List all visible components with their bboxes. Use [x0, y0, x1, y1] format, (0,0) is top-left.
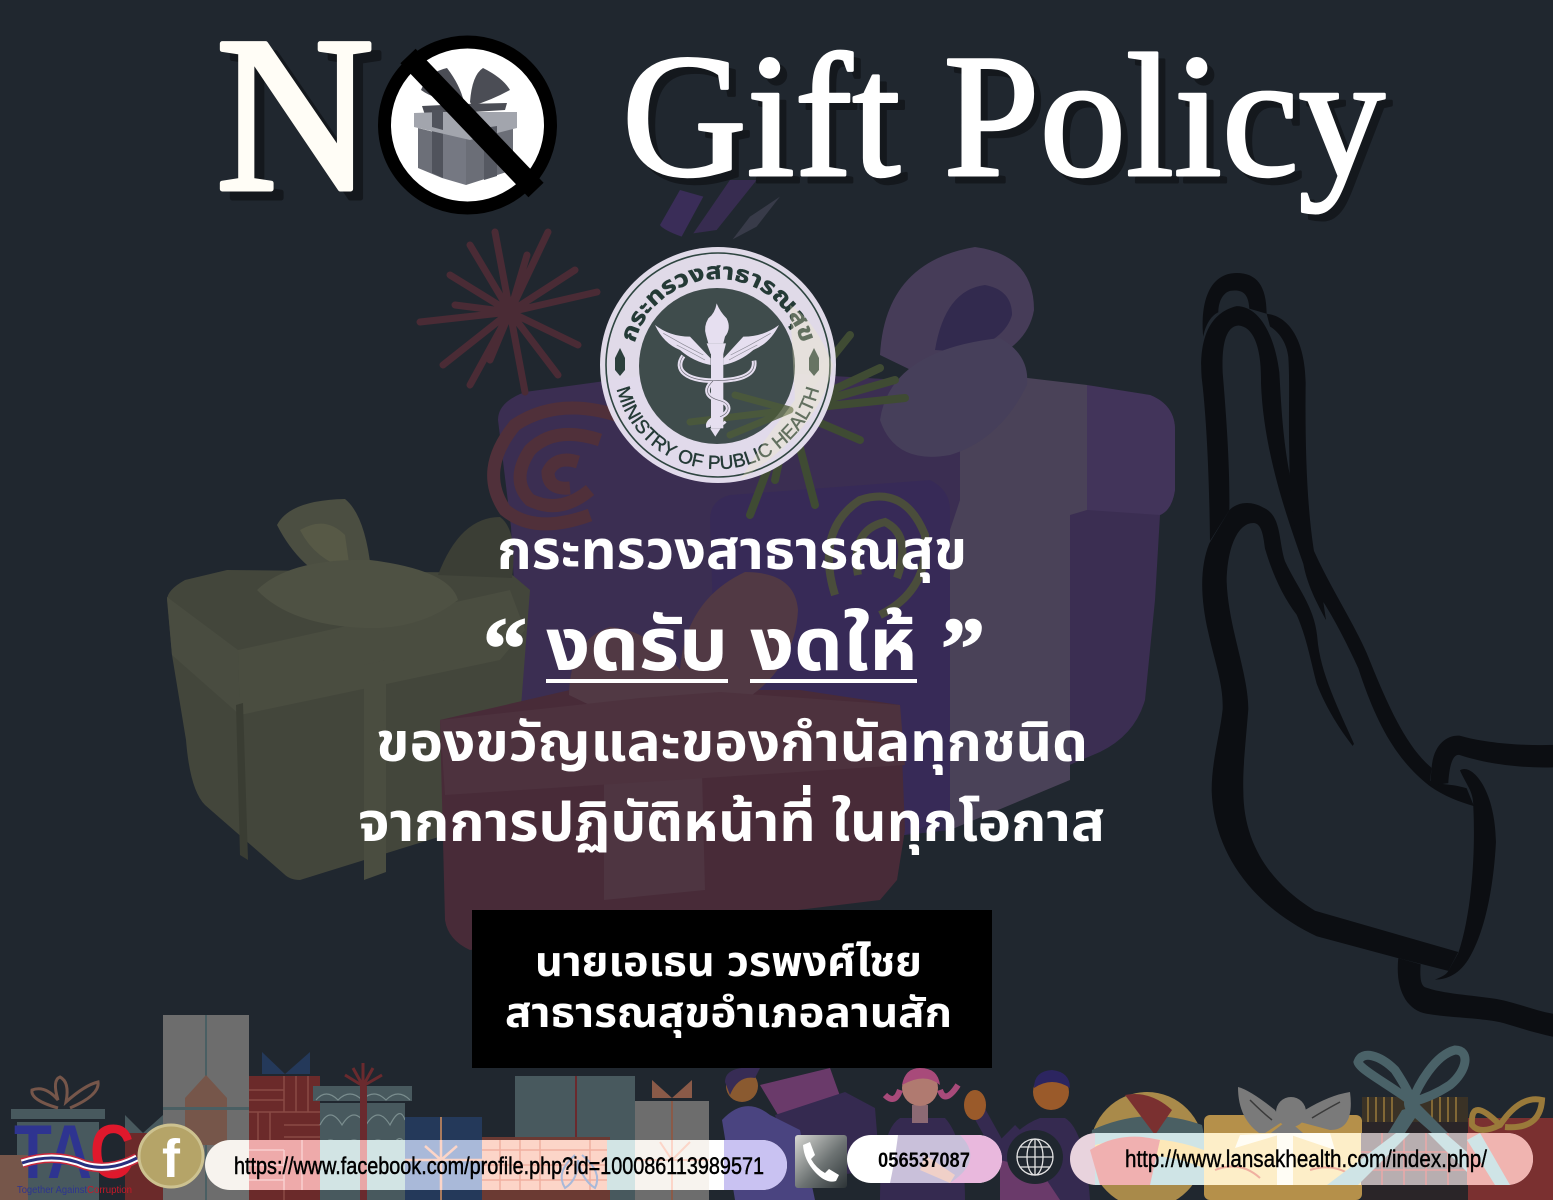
gift: tall gray	[163, 1015, 249, 1200]
heading: no receive no give: ”	[941, 601, 985, 698]
gift: dark grid with teal bow	[1358, 1050, 1468, 1200]
seal: green rays showing through	[690, 395, 790, 435]
text block: duty line: จากการปฏิบัติหน้าที่ ในทุกโอกาส	[358, 785, 1105, 855]
logo: TAC: TA	[14, 1110, 92, 1195]
pill: facebook url	[205, 1140, 787, 1190]
heading: no receive no give: “	[483, 601, 527, 698]
gift: round striped egg	[1090, 1092, 1205, 1200]
seal text: English: MINISTRY OF PUBLIC HEALTH	[616, 386, 820, 470]
name: นายเอเธน วรพงศ์ไชย	[535, 938, 922, 985]
icon: raised hand outline	[1201, 273, 1553, 1037]
heading: no receive no give: งดรับ	[546, 603, 728, 686]
title: Gift Policy: Gift Policy	[622, 19, 1385, 214]
pill: website url: http://www.lansakhealth.com/index.php/	[1125, 1146, 1487, 1173]
logo: TAC: Corruption	[87, 1185, 132, 1196]
panel: name box	[472, 910, 992, 1068]
title: N letter: N	[226, 1, 384, 247]
pill: phone number: 056537087	[878, 1149, 970, 1172]
icon: facebook: f	[162, 1129, 181, 1189]
icon: no gift sign	[384, 42, 550, 208]
seal text: Thai: กระทรวงสาธารณสุข	[624, 265, 813, 342]
logo: TAC: Together Against	[17, 1185, 87, 1196]
logo: Ministry of Public Health seal	[600, 247, 836, 483]
gift: dark red behind	[125, 1115, 188, 1200]
gift: red patterned	[249, 1052, 320, 1200]
gift: teal large	[515, 1076, 635, 1200]
background: olive spiral ribbon	[829, 497, 925, 615]
gift: left teal	[0, 1077, 105, 1200]
pill: phone number	[847, 1135, 1002, 1183]
gift: brown checked	[482, 1137, 635, 1200]
background: red firework	[420, 232, 597, 392]
seal translucent highlights	[740, 305, 833, 480]
background: scattered purple ribbon	[660, 180, 780, 239]
heading: ministry name: กระทรวงสาธารณสุข	[497, 521, 967, 583]
gift: navy	[405, 1117, 482, 1200]
gift bow	[421, 68, 510, 115]
icon: facebook	[139, 1125, 203, 1189]
gift: yellow with gray bow	[1204, 1087, 1362, 1200]
background: olive gift	[167, 499, 530, 880]
pill: website url	[1070, 1133, 1533, 1185]
background: red gift	[440, 572, 905, 950]
gift: red with gold bow	[1468, 1099, 1553, 1200]
seal ornaments	[615, 348, 819, 376]
illustration: person carrying gifts	[722, 1068, 880, 1200]
illustration: man waving	[964, 1070, 1090, 1200]
gift: teal scalloped with red ribbon	[313, 1063, 412, 1200]
icon: globe	[1007, 1130, 1063, 1184]
heading: no receive no give	[483, 601, 985, 698]
background: red spiral ribbon	[494, 408, 625, 524]
background: green firework	[750, 335, 905, 515]
pill: facebook url: https://www.facebook.com/profile.php?id=100086113989571	[234, 1153, 764, 1180]
seal emblem: winged torch and serpent	[655, 303, 779, 437]
background: purple gift	[498, 247, 1175, 835]
illustration: woman	[880, 1068, 965, 1200]
gift: gray small	[635, 1080, 709, 1200]
title: Gift Policy: Gift Policy	[629, 26, 1392, 221]
icon: phone tile	[795, 1135, 847, 1188]
logo: TAC: C	[90, 1110, 134, 1195]
heading: no receive no give: งดให้	[750, 603, 917, 686]
position: สาธารณสุขอำเภอลานสัก	[505, 989, 952, 1038]
panel: bottom gifts illustration	[0, 1015, 1553, 1200]
gift box	[414, 110, 517, 185]
text block: gifts line: ของขวัญและของกำนัลทุกชนิด	[376, 713, 1088, 775]
